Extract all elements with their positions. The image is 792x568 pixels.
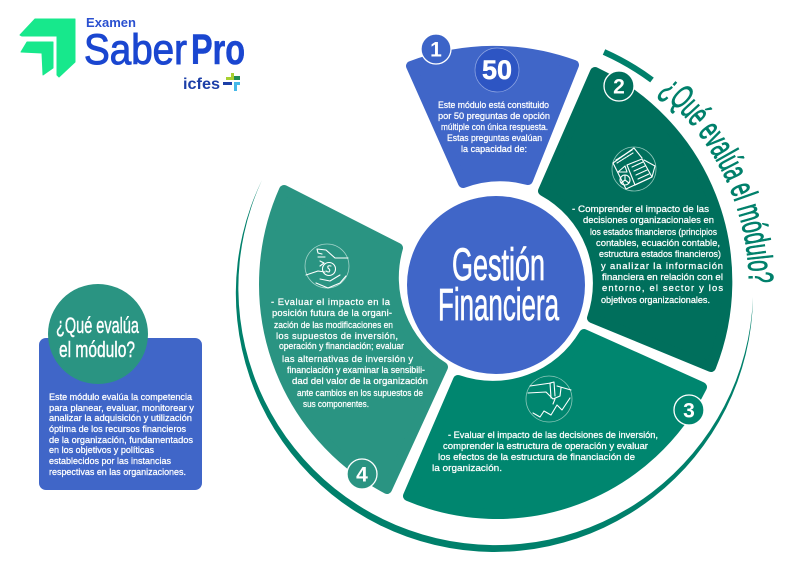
text block: module description: Este módulo está constituido <box>438 99 549 110</box>
left panel text block: en los objetivos y políticas <box>49 444 154 455</box>
text block: panel 3 description: los efectos de la estructura de financiación de <box>438 451 635 462</box>
logo: Examen Saber Pro icfes <box>20 15 245 93</box>
left panel text block: Este módulo evalúa la competencia <box>49 391 193 402</box>
text block: module description: la capacidad de: <box>461 143 527 154</box>
segment 4 shape <box>264 190 443 489</box>
text block: panel 2 description: contables, ecuación contable, <box>596 237 720 248</box>
logo text: Examen: Examen <box>86 15 136 30</box>
text block: panel 4 description: financiación y examinar la sensibili- <box>287 364 425 375</box>
icon: icfes cross <box>223 73 240 91</box>
center circle: Gestión Financiera: Gestión <box>452 239 545 290</box>
segment 2 shape <box>543 72 727 367</box>
panel 2: estados financieros <box>543 71 727 367</box>
number badge 2 <box>604 71 634 101</box>
text block: panel 2 description: - Comprender el impacto de las <box>572 203 709 214</box>
left panel text block: óptima de los recursos financieros <box>49 423 186 434</box>
text block: panel 2 description: entorno, el sector y los <box>602 282 723 293</box>
left panel text block: de la organización, fundamentados <box>49 434 193 445</box>
panel 3: decisiones de inversión <box>408 334 704 514</box>
text block: panel 2 description: financiera en relación con el <box>602 271 723 282</box>
segment 3 shape <box>408 334 702 514</box>
text block: panel 3 description: la organización. <box>432 462 502 473</box>
left panel text block: respectivas en las organizaciones. <box>49 466 186 477</box>
left panel heading circle: el módulo? <box>59 337 135 362</box>
icon: financial documents <box>612 147 656 191</box>
left panel text block: para planear, evaluar, monitorear y <box>49 402 194 413</box>
text block: module description: Estas preguntas evalúan <box>447 132 542 143</box>
text block: module description: por 50 preguntas de opción <box>438 110 550 121</box>
number badge 2: 2 <box>613 76 625 98</box>
panel 4: posición futura <box>264 190 443 489</box>
number badge 1: 1 <box>430 38 442 62</box>
text block: module description: múltiple con única respuesta. <box>441 121 548 132</box>
number badge 3 <box>674 395 704 425</box>
number badge 4 <box>347 459 377 489</box>
icon: hand and growth chart <box>526 376 572 422</box>
text block: panel 4 description: sus componentes. <box>303 398 369 409</box>
logo text: Saber: Saber <box>84 26 187 74</box>
circle: 50 questions <box>475 48 519 92</box>
text block: panel 2 description: y analizar la información <box>601 260 723 271</box>
decorative top arc stroke <box>604 52 652 80</box>
text block: panel 4 description: dad del valor de la organización <box>292 375 428 386</box>
left panel heading circle <box>48 284 148 384</box>
curved title: ¿Qué evalúa el módulo?: ¿Qué evalúa el módulo? <box>658 81 774 282</box>
text block: panel 2 description <box>572 203 723 305</box>
logo text: icfes: icfes <box>183 76 220 93</box>
circle: 50 questions: 50 <box>482 55 512 85</box>
left panel card <box>39 338 202 490</box>
text block: panel 4 description: operación y financiación; evaluar <box>279 340 404 351</box>
icon: green arrow logo <box>20 19 75 77</box>
left panel text block <box>49 391 194 477</box>
text block: panel 4 description: ante cambios en los supuestos de <box>297 387 423 398</box>
text block: panel 2 description: los estados financieros (principios <box>590 226 717 237</box>
segment 1 shape <box>411 51 574 183</box>
center circle: Gestión Financiera: Financiera <box>438 279 560 330</box>
text block: panel 2 description: decisiones organizacionales en <box>583 214 714 225</box>
left panel text block: analizar la adquisición y utilización <box>49 412 192 423</box>
left panel text block: establecidos por las instancias <box>49 455 171 466</box>
center circle: Gestión Financiera <box>407 196 585 374</box>
icon: hands and coin <box>305 244 349 288</box>
text block: panel 2 description: objetivos organizacionales. <box>601 294 710 305</box>
number badge 1 <box>421 34 451 64</box>
logo text: Pro: Pro <box>191 26 245 74</box>
left panel: ¿Qué evalúa el módulo? <box>39 284 202 490</box>
number badge 3: 3 <box>683 400 695 422</box>
text block: panel 4 description: - Evaluar el impacto en la <box>271 296 391 307</box>
decorative ring crescent <box>236 180 753 552</box>
text block: panel 3 description: comprender la estructura de operación y evaluar <box>443 440 648 451</box>
text block: panel 3 description <box>432 429 658 473</box>
text block: module description <box>438 99 550 154</box>
text block: panel 4 description: los supuestos de inversión, <box>276 330 398 341</box>
panel 1: 50 preguntas <box>411 34 574 183</box>
left panel heading circle: ¿Qué evalúa <box>56 313 139 338</box>
text block: panel 4 description: las alternativas de inversión y <box>282 353 413 364</box>
text block: panel 3 description: - Evaluar el impacto de las decisiones de inversión, <box>448 429 658 440</box>
text block: panel 4 description: zación de las modificaciones en <box>274 319 393 330</box>
number badge 4: 4 <box>356 464 368 486</box>
text block: panel 4 description: posición futura de la organi- <box>272 307 392 318</box>
text block: panel 4 description <box>271 296 428 409</box>
text block: panel 2 description: estructura estados financieros) <box>599 248 721 259</box>
